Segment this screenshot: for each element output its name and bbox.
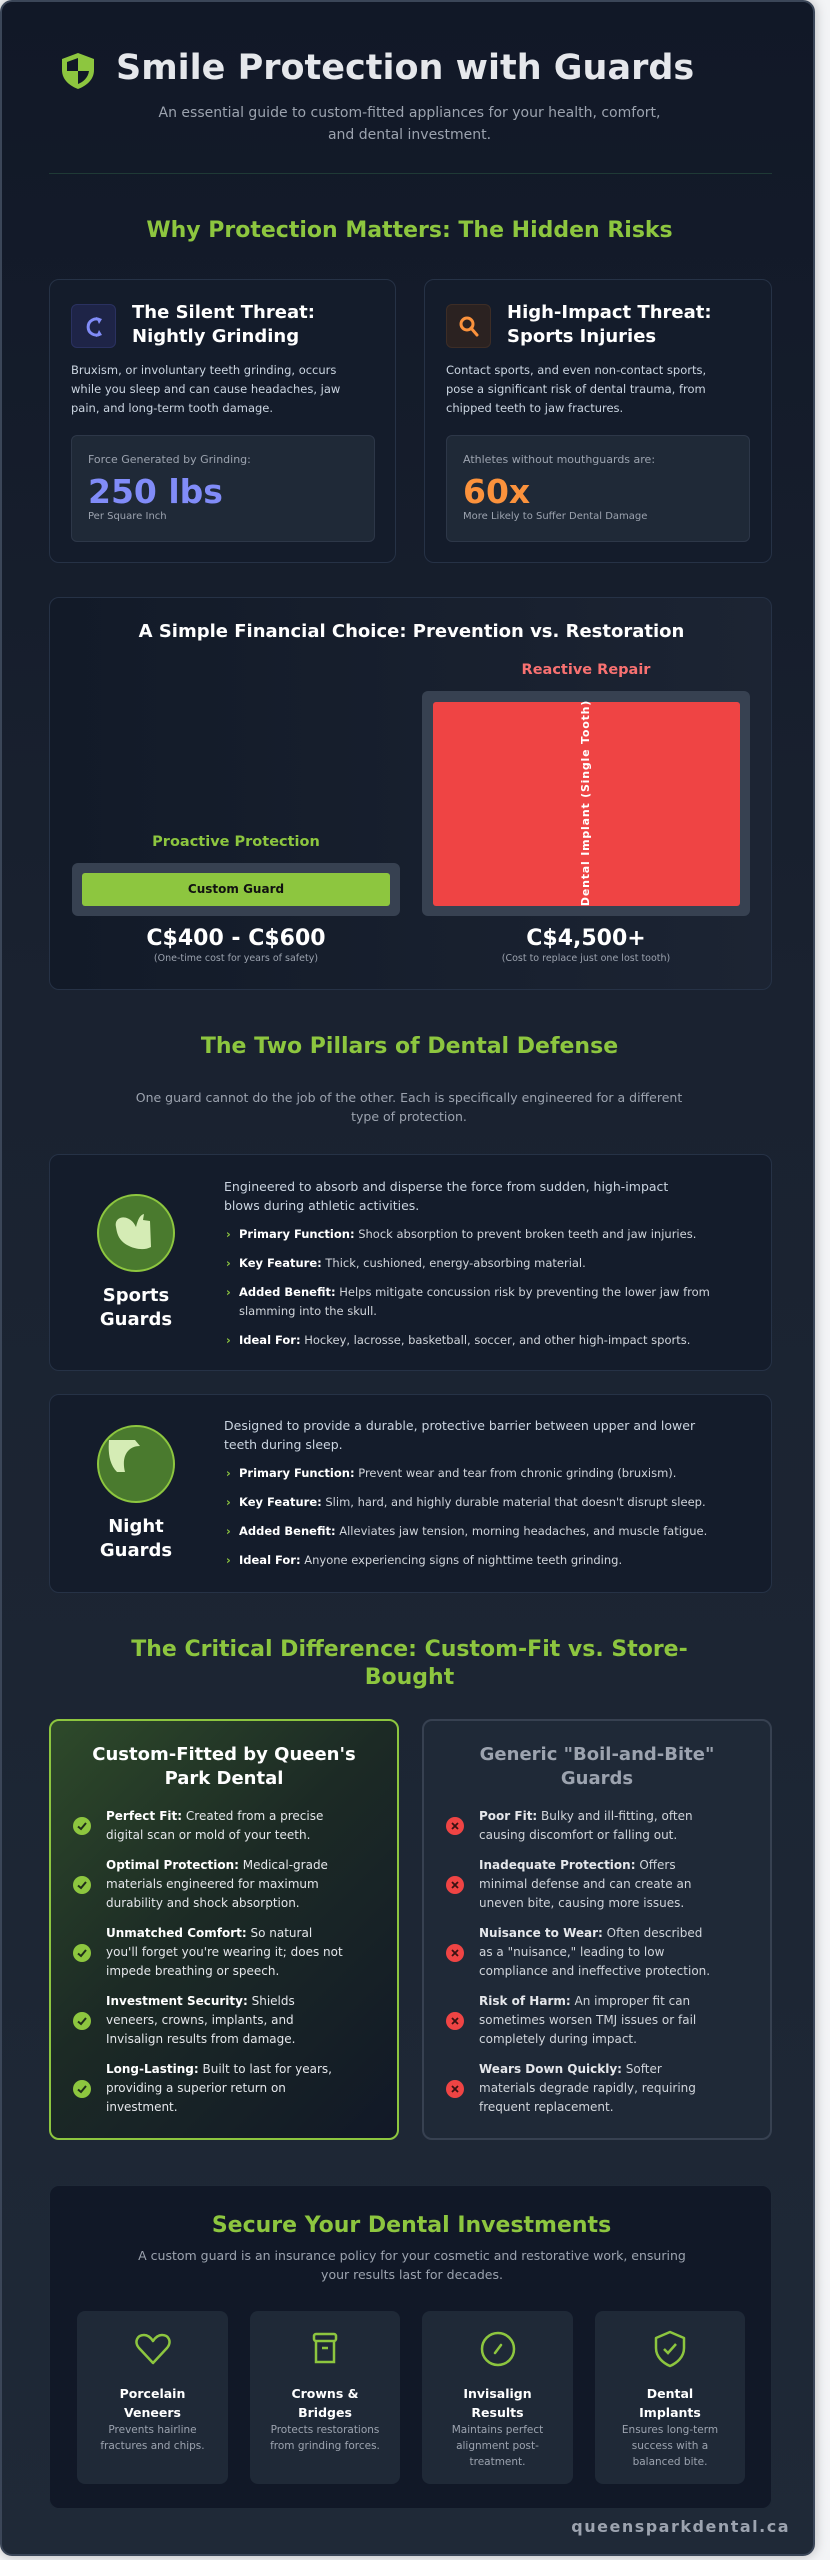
tile: veneers: Prevents hairline fractures and chips.	[100, 2424, 205, 2452]
heading: Secure Your Dental Investments	[212, 2213, 611, 2238]
subtitle: and dental investment.	[328, 127, 491, 143]
card text: chipped teeth to jaw fractures.	[446, 401, 623, 415]
card text: pose a significant risk of dental trauma, from	[446, 382, 706, 396]
bar: dental implant	[422, 691, 750, 916]
card title	[132, 302, 315, 347]
tile: crowns: Crowns &	[291, 2386, 359, 2401]
details: teeth during sleep.	[224, 1437, 343, 1452]
details	[224, 1179, 710, 1347]
card title	[507, 302, 712, 347]
panel: custom-fitted	[49, 1719, 399, 2140]
card text	[446, 363, 706, 415]
stat box: Force Generated by Grinding:	[88, 453, 251, 466]
panel: boil-and-bite	[422, 1719, 772, 2140]
price: implant	[502, 926, 670, 964]
subtitle: your results last for decades.	[321, 2267, 503, 2282]
panel: financial choice	[49, 597, 772, 990]
bar: dental implant: Dental Implant (Single Tooth)	[579, 700, 592, 906]
details: Primary Function: Shock absorption to prevent broken teeth and jaw injuries.	[239, 1227, 696, 1241]
details: Key Feature: Slim, hard, and highly durable material that doesn't disrupt sleep.	[239, 1495, 706, 1509]
stat box: Athletes without mouthguards are:	[463, 453, 655, 466]
list: drawbacks: Inadequate Protection: Offers	[479, 1858, 676, 1872]
list: drawbacks: completely during impact.	[479, 2032, 637, 2046]
heading: critical difference	[131, 1637, 688, 1690]
title: Smile Protection with Guards	[116, 48, 694, 88]
stat box: Per Square Inch	[88, 511, 167, 522]
list: benefits: Long-Lasting: Built to last for years,	[106, 2062, 332, 2076]
price: guard: (One-time cost for years of safety)	[154, 953, 318, 964]
subtitle	[158, 105, 660, 143]
tile: crowns: Protects restorations from grinding forces.	[270, 2424, 380, 2452]
list: benefits: investment.	[106, 2100, 178, 2114]
list: benefits: durability and shock absorption.	[106, 1896, 300, 1910]
tile: implants: Implants	[639, 2405, 701, 2420]
tile: veneers	[77, 2311, 228, 2484]
label: reactive repair: Reactive Repair	[522, 662, 650, 678]
card title: Nightly Grinding	[132, 326, 299, 347]
price: implant: (Cost to replace just one lost tooth)	[502, 953, 670, 964]
title	[480, 1744, 714, 1789]
subtitle	[138, 2248, 686, 2282]
header	[62, 48, 694, 143]
title: Park Dental	[165, 1768, 283, 1789]
tile: invisalign	[422, 2311, 573, 2484]
subtitle: pillars: type of protection.	[351, 1109, 467, 1124]
details: Engineered to absorb and disperse the force from sudden, high-impact	[224, 1179, 668, 1194]
bar: custom guard	[72, 863, 400, 916]
bar: custom guard: Custom Guard	[188, 882, 284, 896]
list: drawbacks: Wears Down Quickly: Softer	[479, 2062, 662, 2076]
title: Guards	[561, 1768, 633, 1789]
icon: grinding	[71, 304, 116, 348]
list: benefits: Invisalign results from damage.	[106, 2032, 295, 2046]
panel: silent threat	[49, 279, 396, 563]
subtitle: A custom guard is an insurance policy for your cosmetic and restorative work, ensuring	[138, 2248, 686, 2263]
list: benefits: Perfect Fit: Created from a precise	[106, 1809, 323, 1823]
tile: invisalign: Maintains perfect alignment post-treatment.	[452, 2424, 543, 2468]
label: proactive protection: Proactive Protection	[152, 834, 320, 850]
stat box: 60x	[463, 472, 530, 511]
card text: Bruxism, or involuntary teeth grinding, occurs while you sleep and can cause headaches, jaw pain, and long-term tooth damage.	[71, 363, 340, 415]
icon: shield	[62, 53, 94, 89]
label: Guards	[100, 1309, 172, 1330]
details: blows during athletic activities.	[224, 1198, 419, 1213]
list: drawbacks: materials degrade rapidly, requiring	[479, 2081, 696, 2095]
panel: sports guards	[49, 1154, 772, 1371]
label: Guards	[100, 1540, 172, 1561]
stat box	[71, 435, 375, 542]
details: Ideal For: Hockey, lacrosse, basketball, soccer, and other high-impact sports.	[239, 1333, 690, 1347]
list: benefits: Optimal Protection: Medical-grade	[106, 1858, 328, 1872]
label	[100, 1285, 172, 1330]
stat box	[446, 435, 750, 542]
subtitle: pillars	[136, 1090, 682, 1124]
stat box: More Likely to Suffer Dental Damage	[463, 511, 647, 522]
title	[92, 1744, 356, 1789]
list: drawbacks: sometimes worsen TMJ issues or fail	[479, 2013, 696, 2027]
footer: website: queensparkdental.ca	[571, 2517, 790, 2536]
panel: sports injuries	[424, 279, 772, 563]
label: Night	[108, 1516, 164, 1537]
list: benefits: you'll forget you're wearing it; does not	[106, 1945, 343, 1959]
tile: implants: Dental	[647, 2386, 693, 2401]
list: drawbacks: compliance and ineffective protection.	[479, 1964, 710, 1978]
list: drawbacks: minimal defense and can create an	[479, 1877, 691, 1891]
details	[224, 1418, 707, 1567]
heading: critical difference: The Critical Difference: Custom-Fit vs. Store-	[131, 1637, 688, 1662]
price: guard: C$400 - C$600	[146, 926, 326, 951]
tile: invisalign: Invisalign	[463, 2386, 532, 2401]
details: Ideal For: Anyone experiencing signs of nighttime teeth grinding.	[239, 1553, 622, 1567]
list: benefits: Unmatched Comfort: So natural	[106, 1926, 312, 1940]
details: Primary Function: Prevent wear and tear from chronic grinding (bruxism).	[239, 1466, 676, 1480]
heading: why protection matters: Why Protection Matters: The Hidden Risks	[146, 218, 673, 243]
label: Sports	[103, 1285, 169, 1306]
list: drawbacks	[446, 1809, 710, 2114]
list: drawbacks: uneven bite, causing more issues.	[479, 1896, 684, 1910]
details: Added Benefit: Alleviates jaw tension, morning headaches, and muscle fatigue.	[239, 1524, 707, 1538]
tile: crowns: Bridges	[298, 2405, 352, 2420]
list: benefits: providing a superior return on	[106, 2081, 286, 2095]
icon: sports guard	[97, 1194, 175, 1272]
tile: crowns	[250, 2311, 400, 2484]
heading: critical difference: Bought	[365, 1665, 454, 1690]
card title: Sports Injuries	[507, 326, 656, 347]
label	[100, 1516, 172, 1561]
list: drawbacks: frequent replacement.	[479, 2100, 614, 2114]
details: Key Feature: Thick, cushioned, energy-absorbing material.	[239, 1256, 586, 1270]
subtitle: pillars: One guard cannot do the job of the other. Each is specifically engineered for a different	[136, 1090, 682, 1105]
list: benefits: impede breathing or speech.	[106, 1964, 279, 1978]
list: benefits: Investment Security: Shields	[106, 1994, 295, 2008]
list: drawbacks: Nuisance to Wear: Often described	[479, 1926, 702, 1940]
tile: implants	[595, 2311, 745, 2484]
tile: implants: Ensures long-term success with a balanced bite.	[622, 2424, 718, 2468]
list: drawbacks: Risk of Harm: An improper fit can	[479, 1994, 690, 2008]
card title: High-Impact Threat:	[507, 302, 712, 323]
tile: veneers: Porcelain	[120, 2386, 185, 2401]
subtitle: An essential guide to custom-fitted appliances for your health, comfort,	[159, 105, 660, 121]
title: Generic "Boil-and-Bite"	[480, 1744, 714, 1765]
heading: two pillars: The Two Pillars of Dental Defense	[201, 1034, 618, 1059]
price: implant: C$4,500+	[526, 926, 646, 951]
tile: invisalign: Results	[471, 2405, 524, 2420]
icon: impact	[446, 304, 491, 348]
details: Added Benefit: Helps mitigate concussion risk by preventing the lower jaw from slamming into the skull.	[239, 1285, 710, 1318]
icon: night guard	[97, 1425, 175, 1503]
stat box: 250 lbs	[88, 472, 223, 511]
details: Designed to provide a durable, protective barrier between upper and lower	[224, 1418, 695, 1433]
panel: night guards	[49, 1394, 772, 1593]
panel: secure investments	[49, 2185, 772, 2509]
list: drawbacks: causing discomfort or falling out.	[479, 1828, 677, 1842]
list: drawbacks: as a "nuisance," leading to low	[479, 1945, 664, 1959]
list: benefits: veneers, crowns, implants, and	[106, 2013, 294, 2027]
chart title: A Simple Financial Choice: Prevention vs. Restoration	[139, 621, 684, 642]
tile: veneers: Veneers	[124, 2405, 181, 2420]
card title: The Silent Threat:	[132, 302, 315, 323]
price: guard	[146, 926, 326, 964]
list: benefits: materials engineered for maximum	[106, 1877, 319, 1891]
card text: Contact sports, and even non-contact sports,	[446, 363, 706, 377]
list: benefits	[73, 1809, 343, 2114]
list: drawbacks: Poor Fit: Bulky and ill-fitting, often	[479, 1809, 693, 1823]
title: Custom-Fitted by Queen's	[92, 1744, 356, 1765]
list: benefits: digital scan or mold of your teeth.	[106, 1828, 310, 1842]
